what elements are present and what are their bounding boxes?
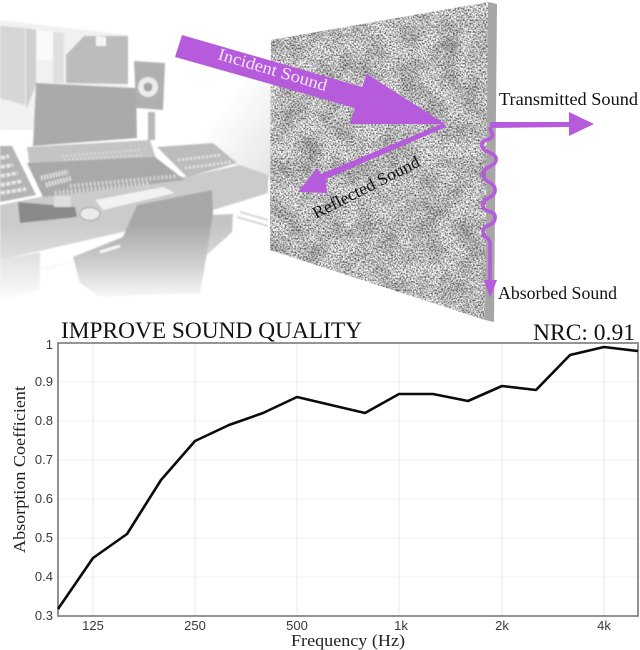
keyboard on desk	[95, 187, 175, 210]
arrow: transmitted sound	[490, 112, 594, 136]
x axis tick labels: 500	[286, 618, 308, 633]
y axis tick labels: 0.5	[35, 530, 53, 545]
label: absorbed sound: Absorbed Sound	[498, 283, 617, 303]
grid lines	[58, 343, 638, 616]
floor rails	[237, 212, 268, 226]
left keyboard console	[0, 146, 36, 202]
photo fade to white	[0, 0, 272, 320]
mouse	[80, 208, 100, 220]
absorption curve	[58, 347, 638, 609]
y axis tick labels: 0.4	[35, 569, 53, 584]
under desk highlights	[42, 246, 120, 270]
x axis tick labels: 2k	[495, 618, 509, 633]
y axis tick labels	[35, 337, 53, 623]
desk	[0, 165, 268, 260]
NRC value: NRC: 0.91	[533, 320, 635, 345]
x axis tick labels: 250	[184, 618, 206, 633]
panel front face	[265, 0, 490, 325]
office chair	[73, 190, 213, 297]
arrow: reflected sound	[298, 123, 446, 193]
panel side edge	[485, 2, 497, 322]
absorption chart	[10, 337, 638, 650]
small device	[18, 196, 77, 223]
arrow: absorbed sound wave	[482, 127, 497, 298]
title: IMPROVE SOUND QUALITY	[61, 318, 362, 343]
x axis title: Frequency (Hz)	[291, 631, 405, 650]
y axis tick labels: 0.8	[35, 413, 53, 428]
label: incident sound: Incident Sound	[216, 45, 330, 95]
chart frame	[58, 343, 638, 616]
y axis tick labels: 0.7	[35, 452, 53, 467]
wall right of window	[198, 78, 272, 180]
studio photo background	[0, 20, 272, 300]
mixing console	[27, 140, 237, 197]
y axis tick labels: 0.6	[35, 491, 53, 506]
y axis title: Absorption Coefficient	[10, 386, 29, 553]
y axis tick labels: 0.3	[35, 608, 53, 623]
label: reflected sound: Reflected Sound	[309, 152, 423, 223]
arrow: incident sound	[175, 35, 445, 124]
window with city view	[0, 20, 128, 130]
monitor	[33, 83, 137, 146]
y axis tick labels: 0.9	[35, 374, 53, 389]
studio speaker	[134, 61, 165, 140]
label: transmitted sound: Transmitted Sound	[499, 89, 638, 109]
x axis tick labels: 125	[82, 618, 104, 633]
acoustic panel	[265, 0, 497, 325]
y axis tick labels: 1	[46, 337, 53, 352]
x axis tick labels	[82, 618, 611, 633]
x axis tick labels: 4k	[597, 618, 611, 633]
x axis tick labels: 1k	[394, 618, 408, 633]
